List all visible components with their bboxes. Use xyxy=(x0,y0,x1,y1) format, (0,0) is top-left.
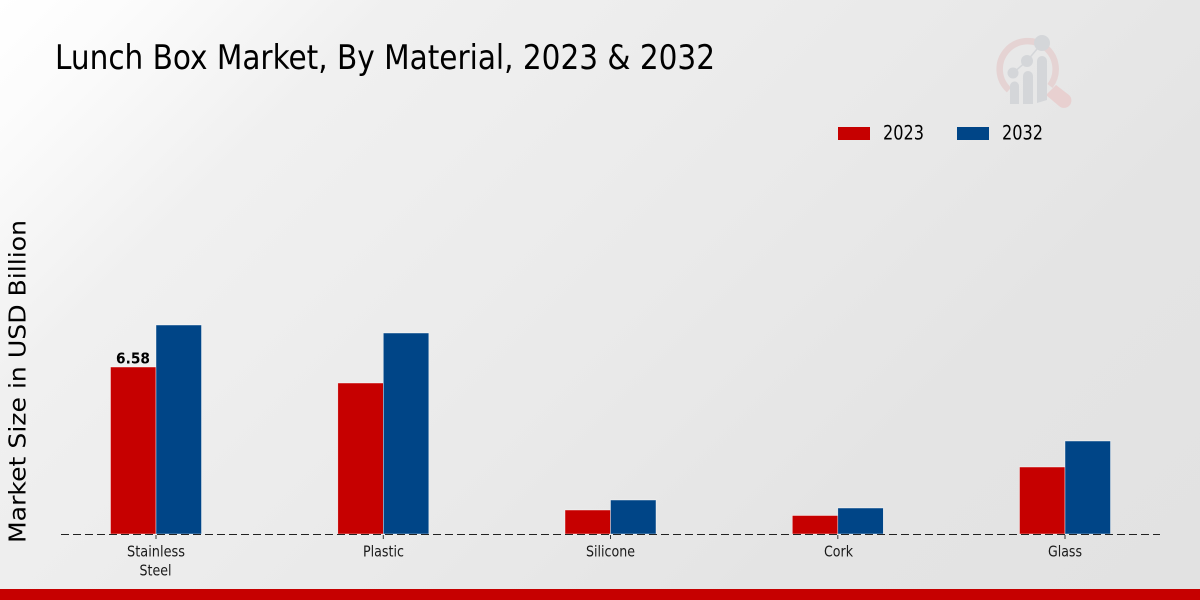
legend: 2023 xyxy=(838,122,924,144)
x label: Glass: Glass xyxy=(1048,542,1082,560)
legend xyxy=(838,122,1043,144)
bars: Plastic xyxy=(338,333,429,534)
x axis baseline xyxy=(61,534,1160,536)
footer bar xyxy=(0,589,1200,600)
x label: Stainless Steel: Steel xyxy=(140,562,172,580)
x label: Plastic: Plastic xyxy=(363,542,404,560)
y axis title: Market Size in USD Billion xyxy=(4,220,32,543)
title: Lunch Box Market, By Material, 2023 & 2032 xyxy=(55,38,715,78)
legend: 2023: 2023 xyxy=(883,122,924,144)
icon: magnifier logo xyxy=(1000,35,1071,108)
bars: Stainless Steel xyxy=(110,325,202,534)
legend: 2032 xyxy=(957,122,1043,144)
x label: Stainless Steel xyxy=(127,542,185,580)
bars: Glass xyxy=(1020,441,1110,534)
value label: 6.58 xyxy=(116,350,150,368)
x label: Cork: Cork xyxy=(824,542,854,560)
bar chart xyxy=(61,325,1160,580)
legend: 2032: 2032 xyxy=(1002,122,1043,144)
bars: Silicone xyxy=(565,500,656,534)
bars: Cork xyxy=(792,508,883,534)
x label: Stainless Steel: Stainless xyxy=(127,542,185,560)
x label: Silicone: Silicone xyxy=(586,542,635,560)
